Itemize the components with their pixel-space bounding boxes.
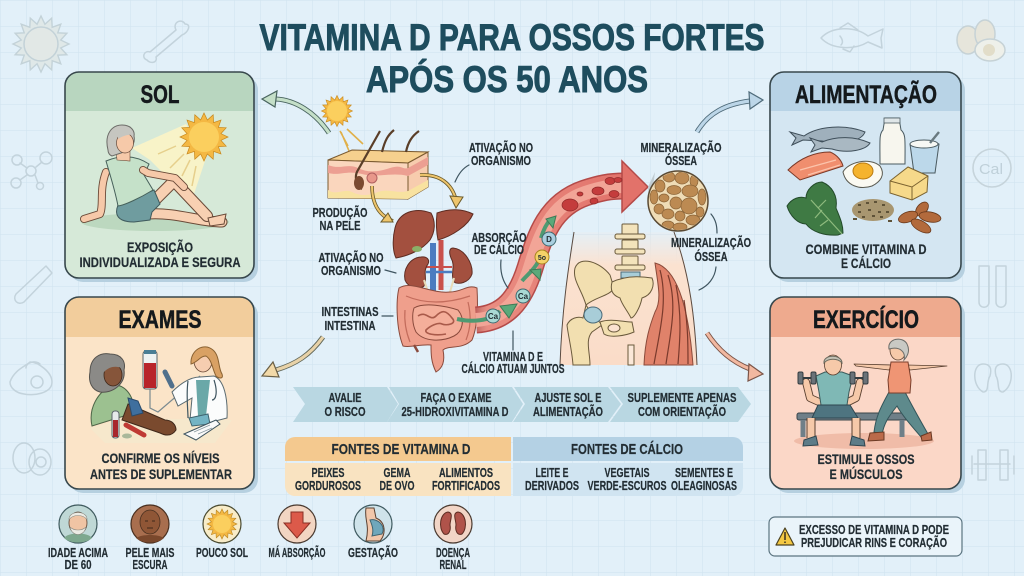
background icon: fish	[821, 23, 883, 52]
illustration: calcium and vitamin D molecules: Ca	[518, 292, 529, 301]
risk factor: pele mais escura: ESCURA	[132, 558, 168, 572]
caption: alimentacao: COMBINE VITAMINA D	[806, 241, 926, 257]
table items: calcio: LEITE E	[536, 466, 568, 480]
table heading: vitamina d: FONTES DE VITAMINA D	[332, 441, 471, 458]
label: mineralizacao ossea lower: MINERALIZAÇÃO	[671, 235, 751, 250]
step 4: COM ORIENTAÇÃO	[638, 404, 726, 419]
background icon: bone	[144, 21, 189, 62]
background icon: dumbbell	[972, 450, 1014, 480]
illustration: foods	[787, 118, 942, 236]
label: absorcao de calcio	[472, 230, 527, 257]
arrow: skin to liver	[372, 186, 393, 222]
label: mineralizacao ossea top: ÓSSEA	[665, 153, 697, 168]
label: mineralizacao ossea lower	[671, 235, 751, 264]
table items: calcio: SEMENTES E	[675, 466, 733, 480]
label: ativacao no organismo top	[469, 140, 533, 168]
illustration: calcium and vitamin D molecules: 5o	[538, 255, 546, 262]
title: VITAMINA D PARA OSSOS FORTES	[260, 17, 764, 58]
risk factor: idade acima de 60: DE 60	[64, 558, 92, 572]
background icon: eggs and halved egg	[957, 20, 1005, 61]
illustration: seniors exercising	[794, 339, 947, 449]
step 4: SUPLEMENTE APENAS	[628, 391, 736, 405]
label: ativacao no organismo middle: ATIVAÇÃO NO	[318, 250, 384, 265]
illustration: intestines	[397, 286, 477, 372]
label: intestinas intestina	[322, 305, 378, 333]
risk factor: gestacao: GESTAÇÃO	[348, 545, 398, 560]
illustration: bloodstream arrow	[476, 161, 648, 320]
label: mineralizacao ossea top	[640, 140, 722, 168]
risk factor: gestacao	[348, 505, 398, 560]
caption: exames: CONFIRME OS NÍVEIS	[102, 450, 220, 466]
step 3: AJUSTE SOL E	[534, 391, 602, 405]
step 4	[610, 387, 751, 422]
heading: sol: SOL	[140, 81, 180, 109]
background icon: test tube	[15, 266, 52, 303]
caption: alimentacao: E CÁLCIO	[841, 255, 891, 271]
illustration: blood test	[89, 347, 232, 443]
risk factor: pele mais escura: PELE MAIS	[126, 546, 174, 560]
step 1	[293, 387, 398, 422]
step 3	[513, 387, 621, 422]
illustration: calcium and vitamin D molecules: D	[546, 235, 552, 244]
illustration: calcium and vitamin D molecules	[457, 216, 556, 323]
table items: vitamina d: PEIXES	[312, 466, 344, 480]
heading: exames: EXAMES	[118, 306, 202, 334]
title: APÓS OS 50 ANOS	[366, 58, 648, 100]
process steps	[293, 387, 751, 422]
panel: alimentacao	[770, 72, 965, 282]
illustration: pelvis and muscle	[560, 224, 697, 365]
risk factor: doenca renal	[434, 505, 472, 572]
panel: sol	[65, 72, 258, 282]
table items: vitamina d	[295, 466, 500, 493]
caption: exercicio	[818, 451, 914, 482]
background icon: eggs	[13, 443, 51, 475]
label: producao na pele: PRODUÇÃO	[312, 205, 368, 220]
table items: calcio: VEGETAIS	[604, 466, 650, 480]
illustration: skin block	[328, 130, 428, 199]
background icon: calcium pill	[973, 149, 1011, 187]
label: producao na pele: NA PELE	[320, 219, 360, 233]
table items: calcio	[525, 466, 737, 493]
label: absorcao de calcio: DE CÁLCIO	[474, 242, 524, 257]
icon: warning triangle	[776, 528, 794, 545]
illustration: calcium and vitamin D molecules: Ca	[488, 312, 499, 321]
table items: vitamina d: FORTIFICADOS	[432, 479, 500, 493]
heading: alimentacao: ALIMENTAÇÃO	[795, 79, 937, 109]
illustration: liver	[393, 210, 473, 258]
label: ativacao no organismo top: ATIVAÇÃO NO	[469, 140, 533, 155]
risk factor: pouco sol: POUCO SOL	[196, 546, 248, 560]
step 2: 25-HIDROXIVITAMINA D	[402, 405, 508, 419]
caption: alimentacao	[806, 241, 926, 271]
arrow: skin to activation	[420, 175, 463, 208]
illustration: bone wedge	[648, 172, 655, 210]
step 2	[387, 387, 523, 422]
table items: calcio: OLEAGINOSAS	[671, 479, 737, 493]
risk factor: idade acima de 60: IDADE ACIMA	[48, 546, 108, 560]
caption: sol	[80, 238, 240, 270]
background icon: calcium pill: Cal	[979, 161, 1003, 178]
warning callout	[769, 517, 962, 556]
risk factor: doenca renal: RENAL	[440, 558, 467, 572]
label: mineralizacao ossea lower: ÓSSEA	[694, 249, 728, 264]
callout leader lines	[382, 165, 717, 350]
caption: sol: INDIVIDUALIZADA E SEGURA	[80, 254, 240, 270]
label: vitamina d e calcio atuam juntos: VITAMINA D E	[483, 350, 543, 364]
label: ativacao no organismo middle: ORGANISMO	[321, 264, 381, 278]
table items: calcio: VERDE-ESCUROS	[588, 479, 666, 493]
label: intestinas intestina: INTESTINAS	[322, 305, 378, 319]
icon: small sun with rays	[322, 96, 363, 158]
arrow: to exames	[262, 337, 323, 377]
risk factor: ma absorcao: MÁ ABSORÇÃO	[268, 545, 326, 560]
label: intestinas intestina: INTESTINA	[324, 319, 376, 333]
illustration: trabecular bone	[648, 171, 708, 231]
risk factor: ma absorcao	[268, 505, 326, 560]
label: vitamina d e calcio atuam juntos: CÁLCIO ATUAM JUNTOS	[462, 361, 564, 376]
background icon: avocado	[10, 362, 52, 395]
risk factor: doenca renal: DOENÇA	[436, 546, 470, 560]
table items: vitamina d: ALIMENTOS	[439, 466, 493, 480]
table heading: calcio: FONTES DE CÁLCIO	[571, 441, 683, 458]
background icon: sun	[13, 16, 69, 72]
title	[260, 17, 764, 100]
table items: vitamina d: GORDUROSOS	[295, 479, 361, 493]
illustration: kidneys and vessels	[405, 240, 472, 292]
panel: exames	[65, 297, 258, 493]
background icon: test tubes	[979, 266, 1006, 307]
table items: vitamina d: DE OVO	[380, 479, 415, 493]
illustration: woman sunbathing	[81, 113, 229, 231]
background icon: kidneys	[975, 364, 1011, 392]
label: mineralizacao ossea top: MINERALIZAÇÃO	[640, 140, 722, 155]
caption: exames: ANTES DE SUPLEMENTAR	[90, 466, 232, 482]
heading: exercicio: EXERCÍCIO	[813, 305, 919, 334]
warning text: EXCESSO DE VITAMINA D PODE	[799, 522, 949, 537]
background icon: molecule	[11, 152, 52, 190]
label: ativacao no organismo top: ORGANISMO	[471, 154, 531, 168]
caption: exercicio: E MÚSCULOS	[830, 465, 902, 482]
risk factor: idade acima de 60	[48, 505, 108, 572]
caption: sol: EXPOSIÇÃO	[127, 238, 193, 255]
label: producao na pele	[312, 205, 368, 233]
risk factor: pouco sol	[196, 505, 248, 560]
risk factor: pele mais escura	[126, 505, 174, 572]
step 1: O RISCO	[324, 405, 366, 419]
step 2: FAÇA O EXAME	[420, 391, 492, 405]
warning text	[799, 522, 949, 550]
table items: calcio: DERIVADOS	[525, 479, 579, 493]
label: vitamina d e calcio atuam juntos	[462, 350, 564, 376]
arrow: to sol	[262, 91, 329, 133]
label: absorcao de calcio: ABSORÇÃO	[472, 230, 527, 245]
arrow: to exercicio	[707, 333, 763, 381]
label: ativacao no organismo middle	[318, 250, 384, 278]
table: fontes de calcio	[513, 437, 743, 496]
step 1: AVALIE	[328, 391, 362, 405]
caption: exercicio: ESTIMULE OSSOS	[818, 451, 914, 467]
table items: vitamina d: GEMA	[384, 466, 410, 480]
caption: exames	[90, 450, 232, 482]
table: fontes de vitamina d	[285, 437, 511, 496]
panel: exercicio	[770, 297, 965, 493]
warning text: PREJUDICAR RINS E CORAÇÃO	[801, 535, 947, 550]
arrow: to alimentacao	[697, 92, 763, 132]
step 3: ALIMENTAÇÃO	[533, 404, 603, 419]
